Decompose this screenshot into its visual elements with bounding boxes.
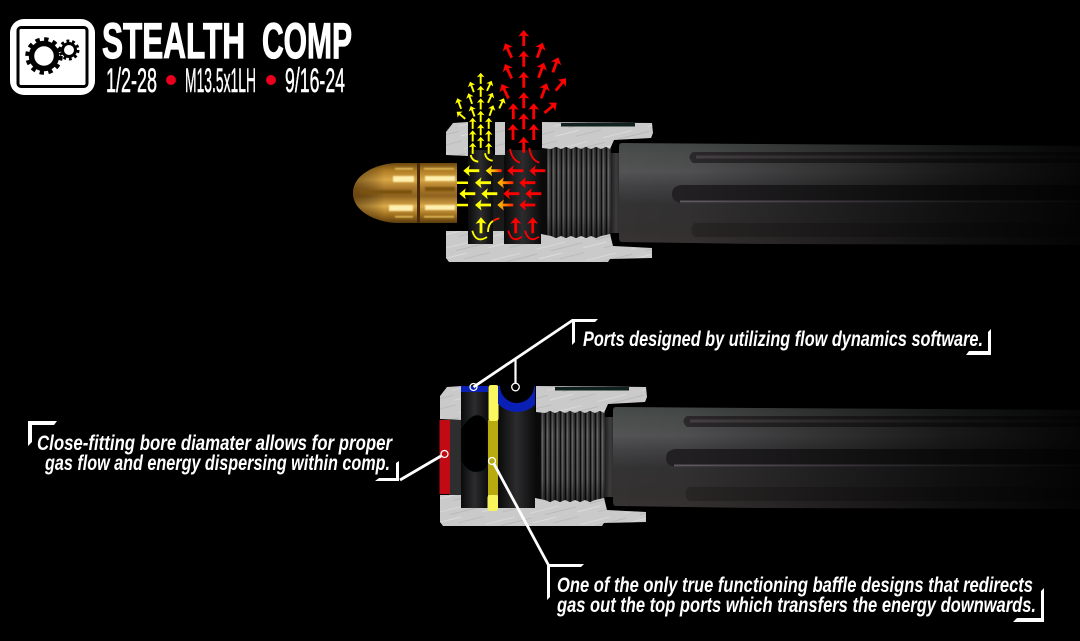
yellow gas flow arrows <box>454 73 513 239</box>
barrel: top <box>610 142 1080 246</box>
bore wall interior <box>449 420 461 495</box>
subtitle: thread sizes <box>106 62 345 100</box>
first chamber <box>461 388 488 508</box>
barrel: bottom <box>604 406 1080 510</box>
subtitle: thread sizes: 1/2-28 <box>106 62 157 100</box>
compensator cutaway: bottom <box>440 386 647 526</box>
port opening <box>461 415 488 472</box>
title: STEALTH <box>102 13 245 69</box>
red highlight: bore <box>440 420 450 494</box>
blue highlight: ports <box>461 386 535 412</box>
title: COMP <box>262 13 352 69</box>
bullet <box>353 163 457 223</box>
yellow highlight: baffle <box>488 385 498 511</box>
callout: ports <box>470 319 991 391</box>
red gas flow arrows <box>497 30 570 239</box>
icon: gears logo <box>10 19 95 95</box>
second chamber <box>498 388 535 508</box>
subtitle: thread sizes: M13.5x1LH <box>185 62 256 100</box>
compensator cutaway: top <box>446 122 653 262</box>
callout: bore <box>28 421 448 481</box>
callout: bore: Close-fitting bore diamater allows for proper <box>37 432 393 455</box>
callout: bore: gas flow and energy dispersing within comp. <box>44 452 390 475</box>
subtitle: thread sizes: 9/16-24 <box>285 62 345 100</box>
callout: baffle <box>488 458 1044 622</box>
